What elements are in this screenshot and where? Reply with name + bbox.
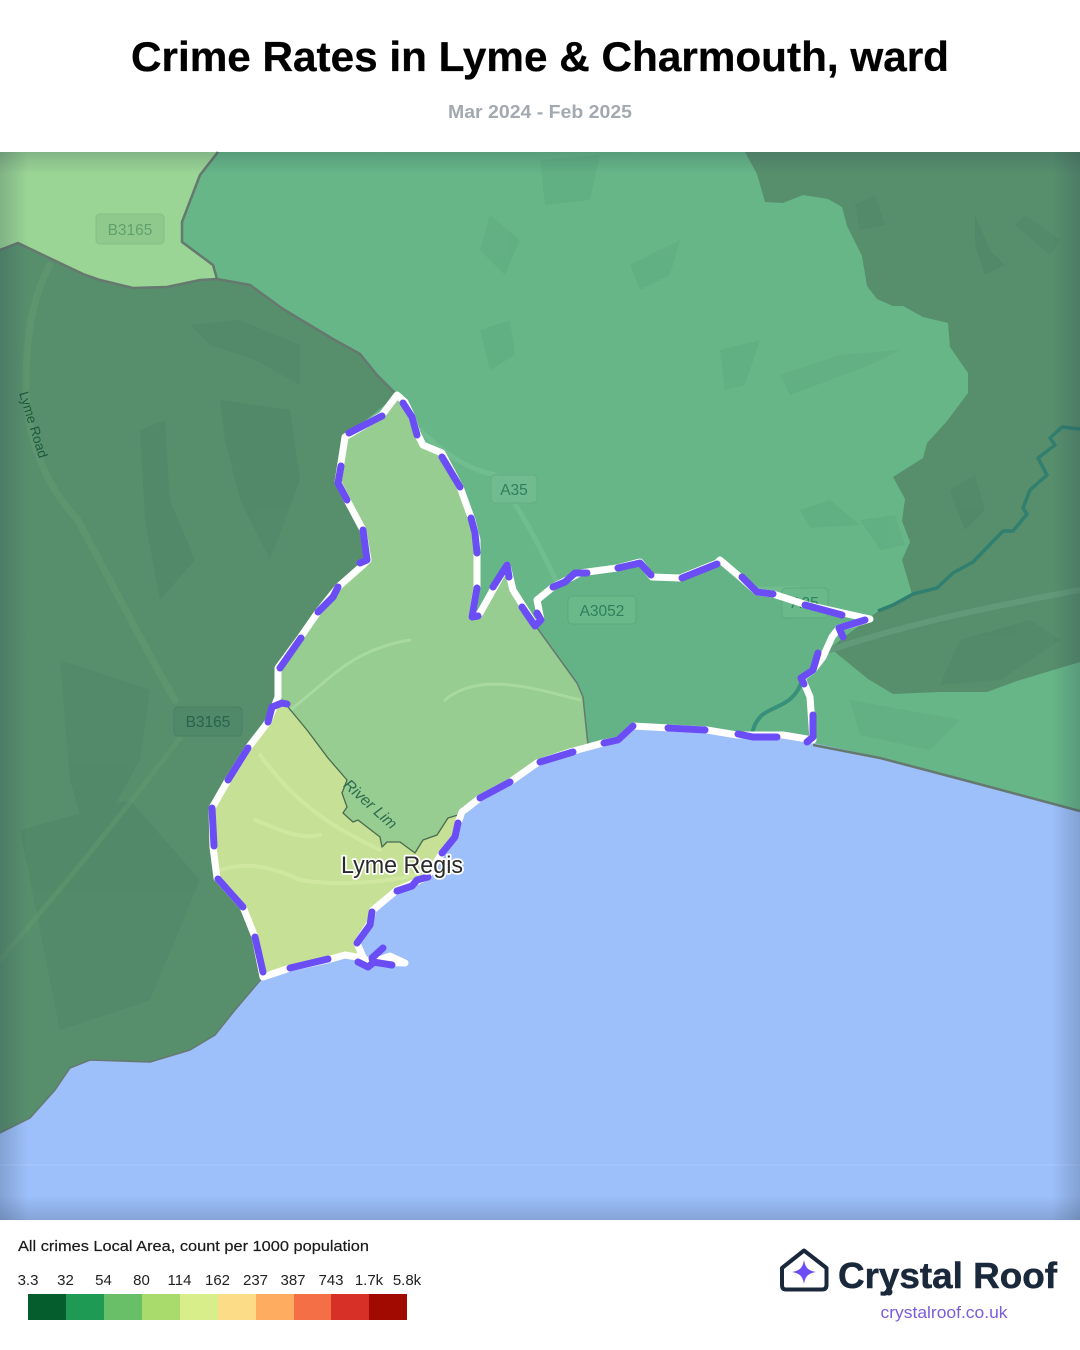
legend tick labels: 387	[280, 1272, 306, 1289]
legend tick labels: 32	[57, 1272, 74, 1289]
ward outline: white base	[212, 395, 870, 977]
land base: north area	[0, 152, 1080, 1220]
rivers	[752, 427, 1080, 738]
legend tick labels: 3.3	[18, 1272, 38, 1289]
area: west dark green	[0, 243, 397, 1133]
subtitle: date range: Mar 2024 - Feb 2025	[448, 101, 632, 122]
logo url: crystalroof.co.uk	[880, 1304, 1008, 1322]
legend tick labels: 5.8k	[393, 1272, 422, 1289]
place label: Lyme Regis: Lyme Regis	[341, 852, 463, 879]
road label: A35 east: A35	[791, 595, 819, 612]
roads	[0, 265, 1080, 960]
ward: Lyme north	[278, 395, 588, 853]
road label: A35: A35	[500, 482, 528, 499]
legend tick labels: 743	[318, 1272, 344, 1289]
road label: A3052: A3052	[580, 603, 624, 620]
icon: keyhole on y	[886, 1288, 892, 1296]
map edge shading	[0, 152, 1080, 1220]
ward: Charmouth	[535, 560, 870, 745]
map panel	[0, 152, 1080, 1220]
legend tick labels: 114	[168, 1272, 191, 1289]
sea	[0, 726, 1080, 1220]
road label: B3165 north: B3165	[108, 222, 152, 239]
legend tick labels: 80	[133, 1272, 150, 1289]
legend title: All crimes Local Area, count per 1000 population	[18, 1238, 369, 1255]
town streets	[220, 755, 430, 883]
logo wordmark: Crystal Roof	[838, 1255, 1058, 1296]
legend tick labels: 1.7k	[355, 1272, 384, 1289]
icon: house with star	[782, 1250, 826, 1290]
legend tick labels: 54	[95, 1272, 112, 1289]
road label: A35	[491, 475, 537, 503]
legend tick labels: 237	[243, 1272, 268, 1289]
river label: River Lim: River Lim	[340, 776, 400, 833]
sea grid line	[0, 1164, 1080, 1166]
road label: B3165 north	[96, 214, 164, 244]
legend	[18, 1238, 422, 1320]
legend tick labels	[18, 1272, 422, 1289]
area boundaries	[0, 152, 1080, 1133]
logo: Crystal Roof	[782, 1250, 1058, 1322]
ward outline: purple dashes	[212, 403, 865, 972]
road label: A35 east	[782, 588, 828, 618]
road label: B3165 south: B3165	[186, 714, 230, 731]
ward: Lyme Regis south-west	[212, 707, 458, 977]
legend colour scale	[28, 1294, 407, 1320]
road label: B3165 south	[174, 707, 242, 736]
title: Crime Rates in Lyme & Charmouth, ward	[131, 33, 949, 80]
woodland patches	[20, 195, 1060, 1030]
road label: A3052	[568, 596, 636, 624]
road label: Lyme Road: Lyme Road	[16, 390, 50, 460]
area: east dark green	[745, 152, 1080, 694]
legend tick labels: 162	[205, 1272, 230, 1289]
area: top-left light green	[0, 152, 218, 288]
